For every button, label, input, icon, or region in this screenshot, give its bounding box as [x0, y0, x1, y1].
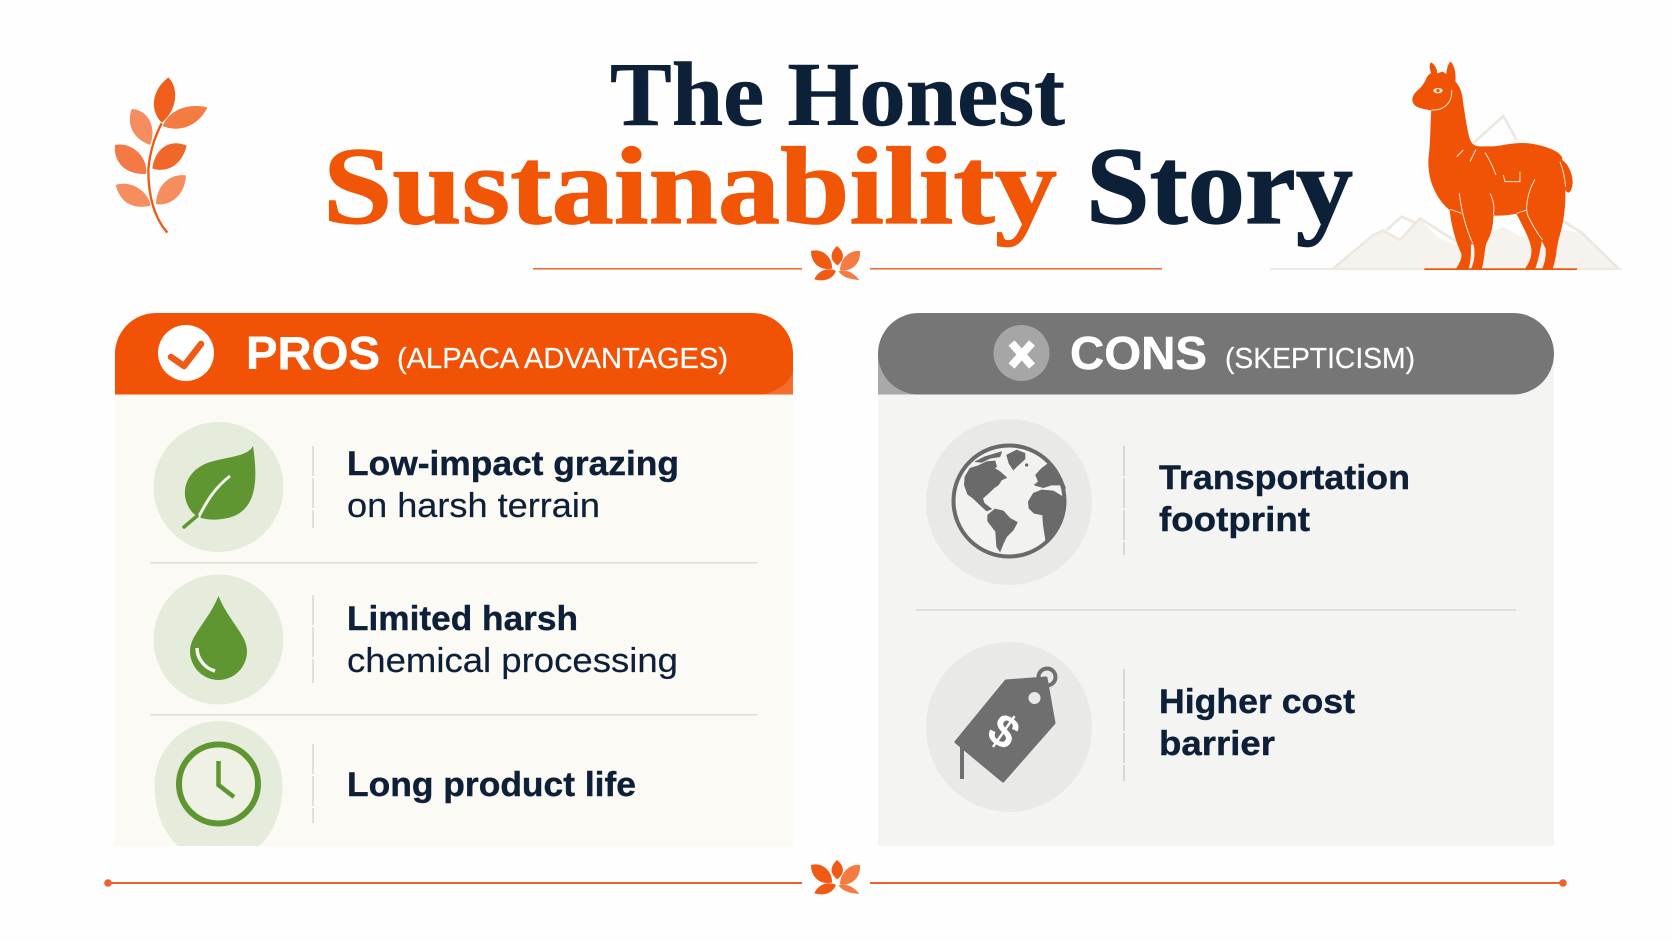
item: transportation footprint: footprint: [1159, 501, 1310, 539]
title: [323, 44, 1353, 247]
item: limited harsh chemical processing: [154, 574, 678, 704]
panel: pros: [115, 313, 793, 846]
title: Sustainability: [323, 125, 1057, 247]
item: higher cost barrier: barrier: [1159, 725, 1275, 763]
icon: leaf: [184, 446, 255, 527]
icon: globe: [954, 446, 1066, 556]
item: transportation footprint: Transportation: [1159, 459, 1410, 497]
alpaca body: [1413, 62, 1572, 268]
icon: clock: [179, 744, 258, 824]
icon: alpaca with mountains: [1270, 62, 1622, 270]
item: limited harsh chemical processing: chemical processing: [347, 642, 678, 680]
panel background: [115, 380, 793, 846]
item: transportation footprint: [926, 419, 1410, 585]
title: Story: [1086, 125, 1353, 247]
cons header: [878, 313, 1554, 394]
item: long product life: Long product life: [347, 766, 636, 804]
item: long product life: [154, 721, 636, 846]
title: The Honest: [610, 44, 1065, 145]
item: low-impact grazing: Low-impact grazing: [347, 445, 679, 483]
panel background: [878, 360, 1554, 846]
icon: x: [994, 325, 1050, 381]
item: higher cost barrier: Higher cost: [1159, 683, 1355, 721]
pros header: (ALPACA ADVANTAGES): [397, 343, 728, 375]
divider: bottom ornament: [104, 860, 1567, 894]
pros header: PROS: [246, 327, 380, 379]
divider: top ornament: [533, 246, 1162, 280]
cons header: CONS: [1070, 327, 1207, 379]
icon: orange leaf sprig: [115, 77, 207, 233]
item: higher cost barrier: [926, 642, 1355, 812]
item: low-impact grazing: on harsh terrain: [347, 487, 600, 525]
item: limited harsh chemical processing: Limited harsh: [347, 600, 578, 638]
mountains: [1270, 116, 1622, 270]
icon: water drop: [190, 596, 247, 680]
icon: price tag: [956, 668, 1056, 781]
cons header: (SKEPTICISM): [1225, 343, 1415, 375]
panel: cons: [878, 313, 1554, 846]
pros header: [115, 313, 793, 394]
item: low-impact grazing: [154, 422, 679, 552]
icon: price tag: $: [979, 702, 1029, 760]
icon: check: [158, 325, 214, 381]
